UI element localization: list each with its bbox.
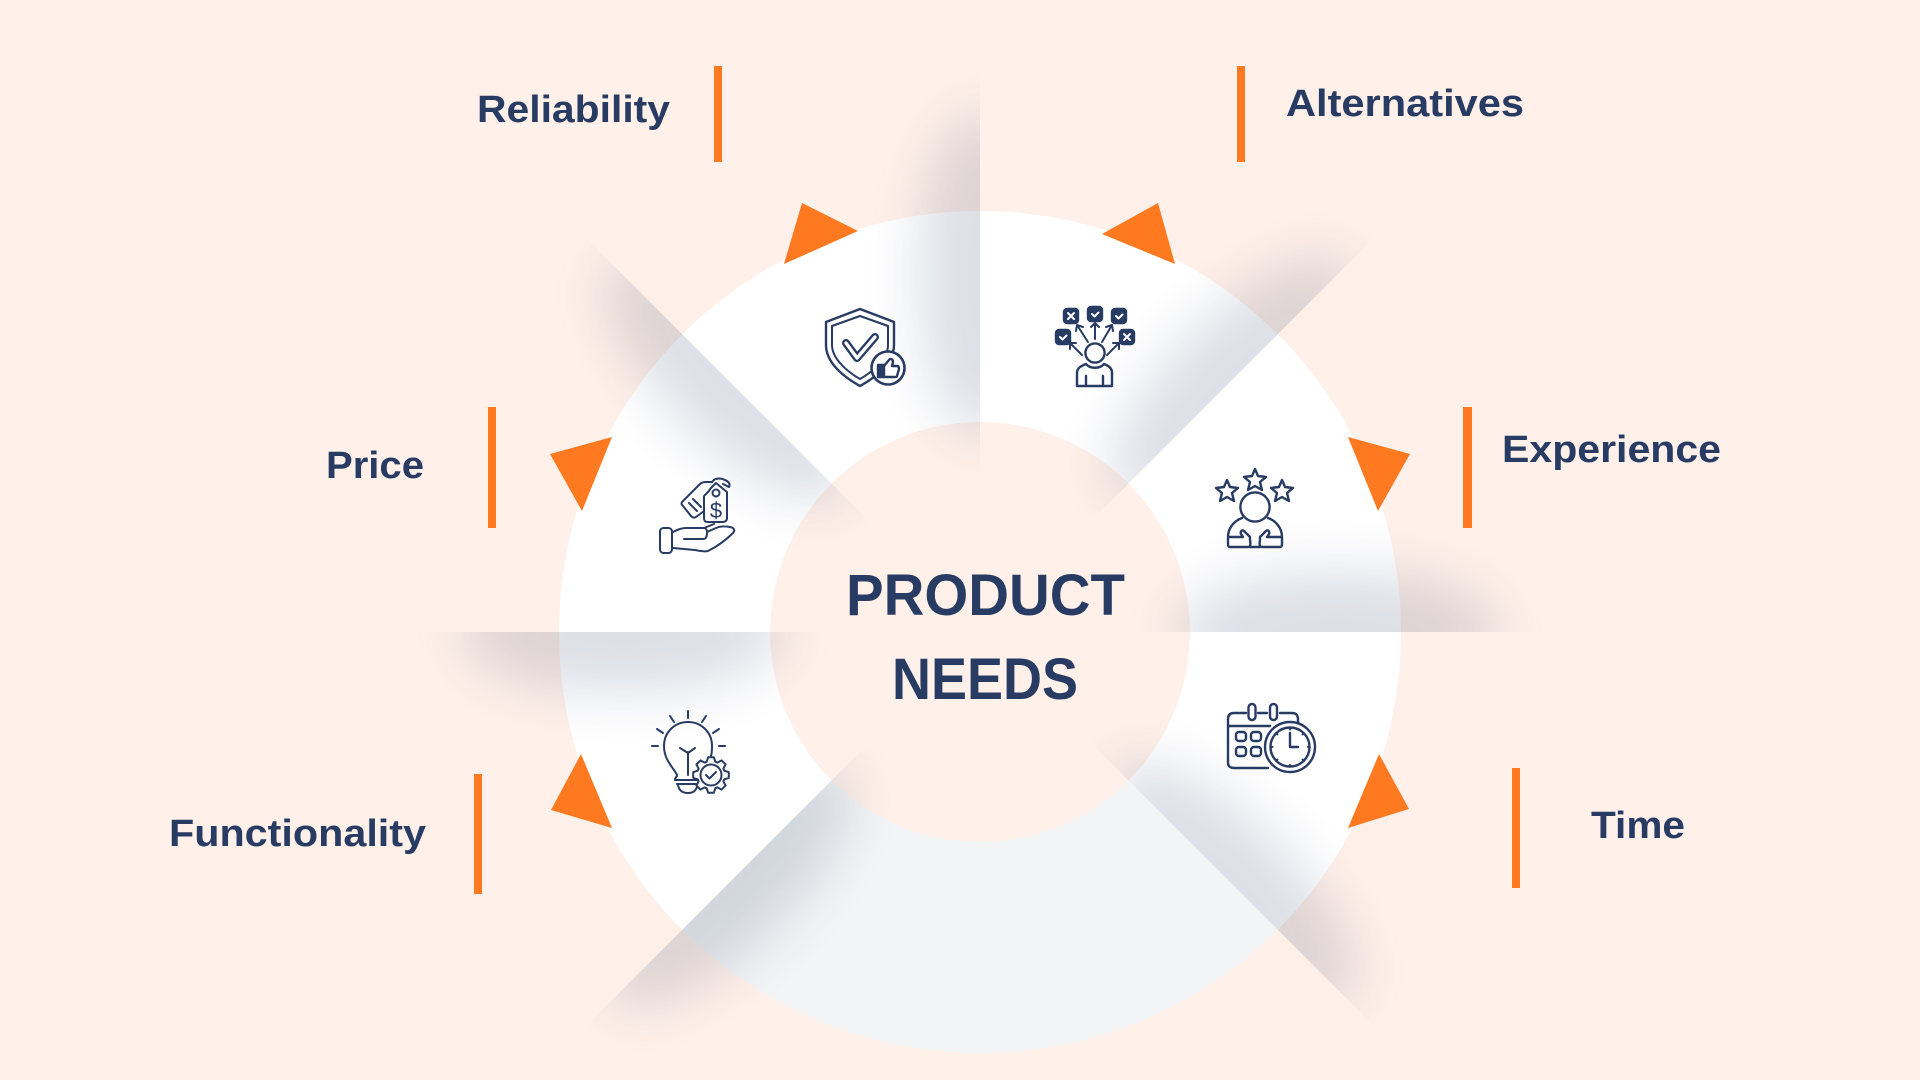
arrow	[1348, 437, 1410, 511]
icon: shield with thumbs up	[826, 309, 904, 386]
accent bar	[1463, 407, 1472, 528]
accent bar	[474, 774, 482, 894]
segment: Price	[326, 407, 734, 553]
segment: Alternatives	[1056, 66, 1524, 386]
center title: PRODUCT	[846, 563, 1125, 628]
arrow	[1348, 754, 1409, 828]
segment: Time	[1228, 704, 1685, 888]
icon: hand holding price tag	[660, 478, 734, 553]
label: Reliability: Reliability	[477, 89, 670, 131]
segment: Reliability	[477, 66, 904, 386]
arrow	[784, 203, 858, 264]
accent bar	[714, 66, 722, 162]
accent bar	[1237, 66, 1245, 162]
icon: calendar with clock	[1228, 704, 1315, 772]
label: Functionality: Functionality	[169, 813, 426, 855]
accent bar	[488, 407, 496, 528]
donut ring	[559, 211, 1401, 1053]
icon: person with stars and thumbs up	[1216, 469, 1293, 547]
arrow	[550, 437, 612, 511]
icon: person choosing options	[1056, 307, 1134, 386]
segment: Experience	[1216, 407, 1721, 547]
arrow	[551, 754, 612, 828]
arrow	[1102, 203, 1175, 264]
icon: light bulb with gear	[652, 711, 729, 793]
label: Price: Price	[326, 445, 424, 487]
center title: NEEDS	[892, 647, 1078, 712]
icon glyph: dollar sign: $	[710, 498, 722, 523]
segment: Functionality	[169, 711, 729, 894]
bottom ring segment	[682, 780, 1278, 1053]
label: Time: Time	[1591, 805, 1685, 847]
infographic: product needs radial diagram	[172, 66, 1720, 1053]
label: Experience: Experience	[1502, 429, 1721, 471]
center title	[846, 563, 1125, 712]
accent bar	[1512, 768, 1520, 888]
label: Alternatives: Alternatives	[1286, 83, 1524, 125]
fold shadows	[460, 112, 1500, 1044]
